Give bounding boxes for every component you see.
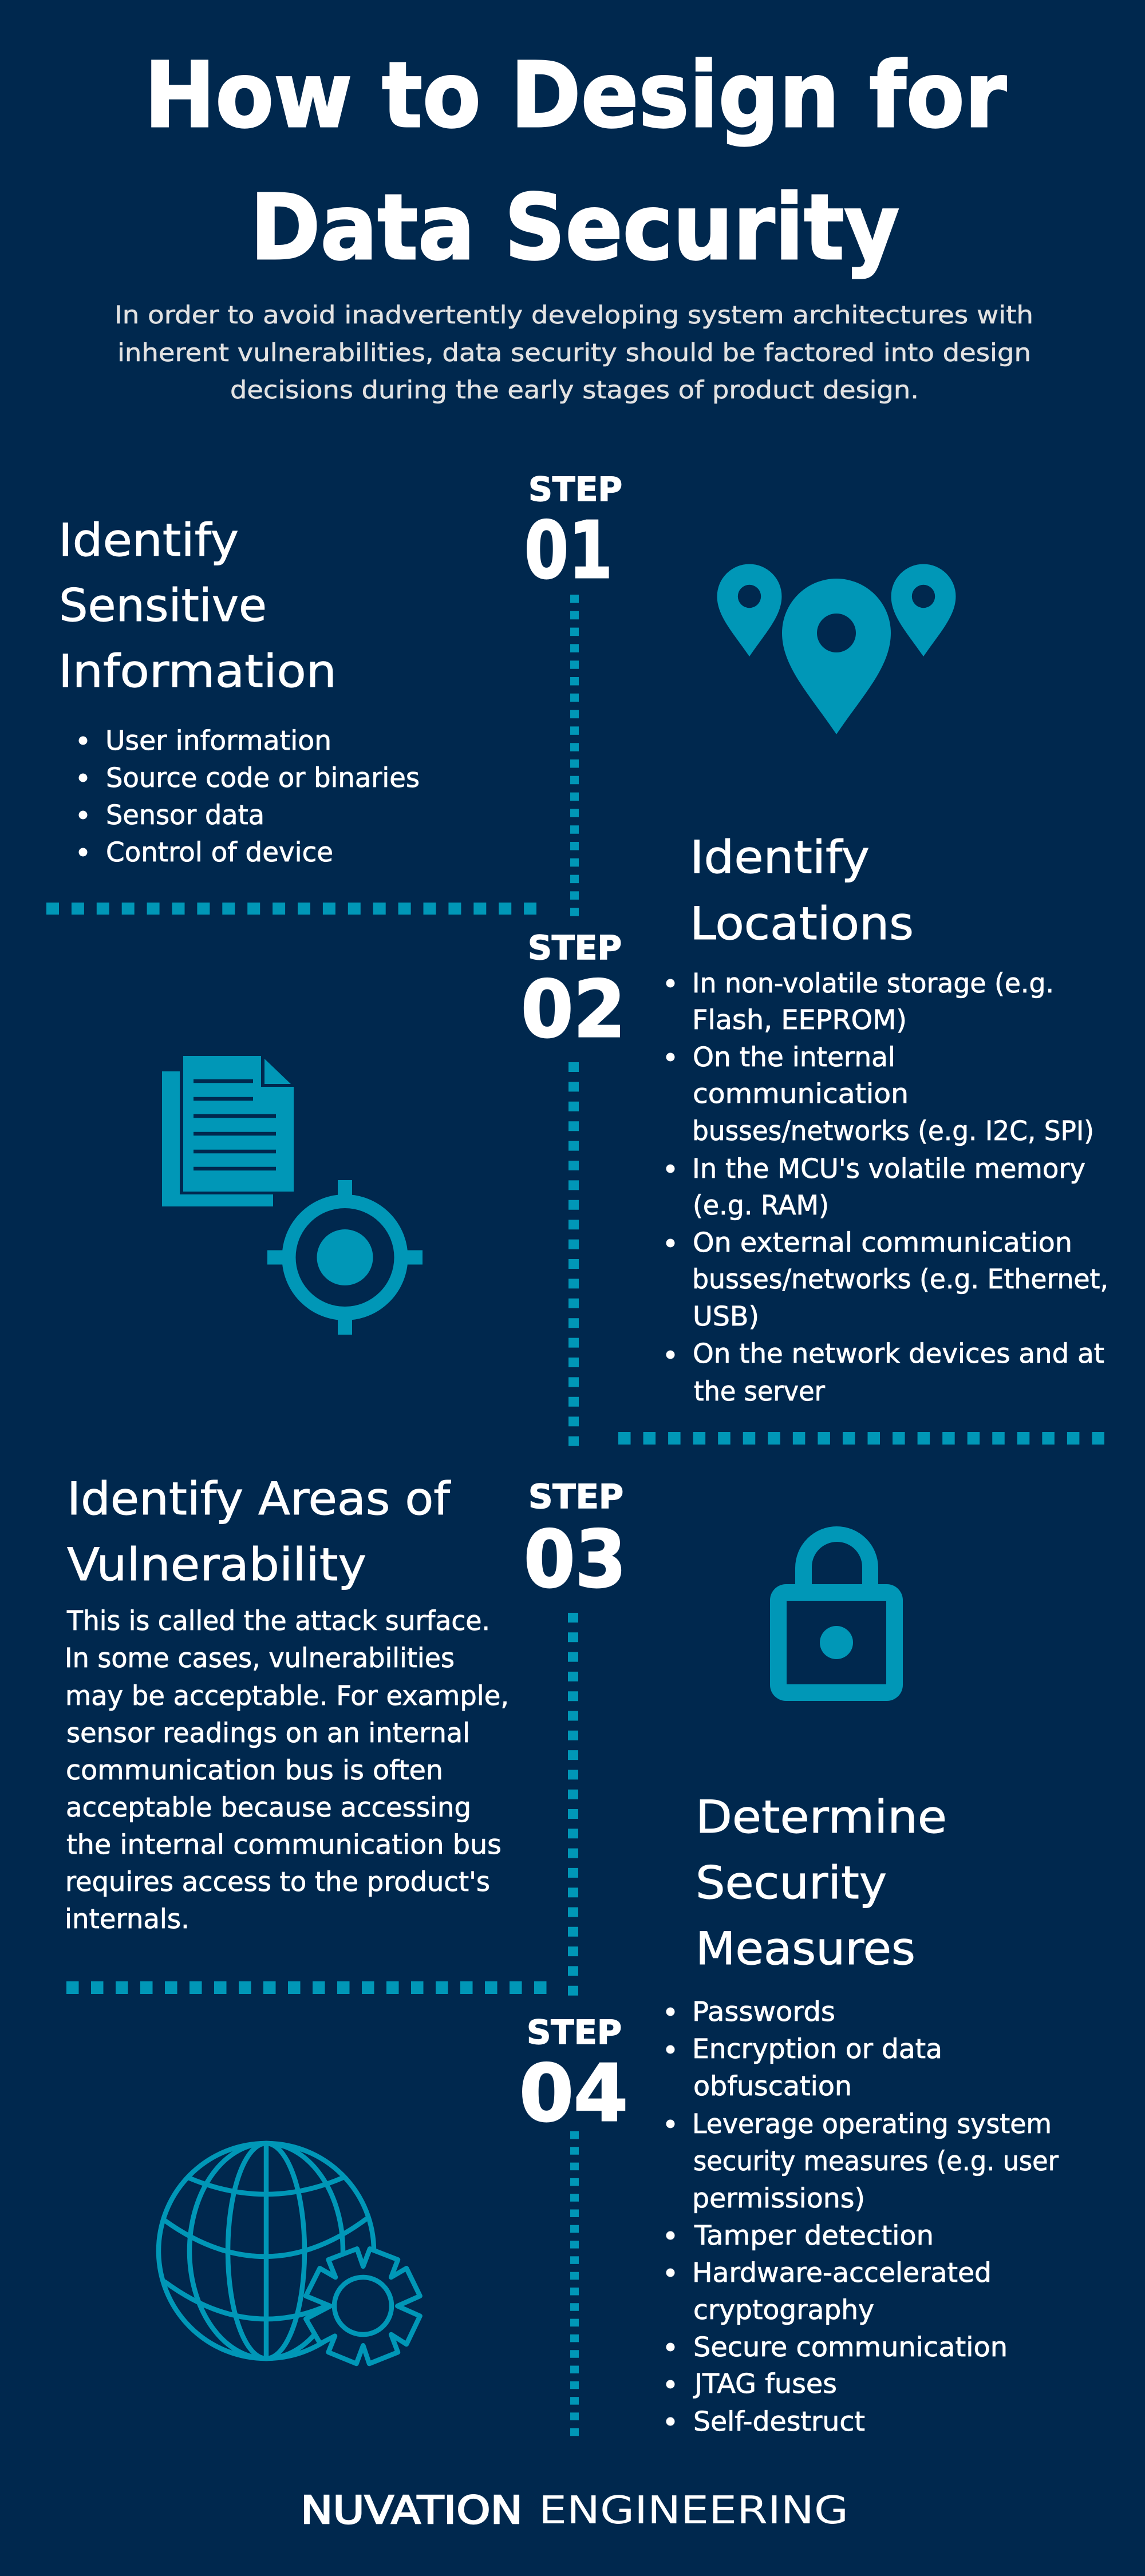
body text: attack surface: the internal communication bus <box>66 1829 502 1861</box>
list: locations: On external communication <box>693 1227 1072 1259</box>
step 02 label: STEP <box>528 928 622 967</box>
heading: determine security measures: Security <box>696 1857 887 1909</box>
list: security measures: cryptography <box>693 2294 874 2326</box>
icon: documents and target <box>162 1056 423 1335</box>
icon: location pins <box>717 564 956 734</box>
list: security measures: obfuscation <box>693 2071 852 2102</box>
heading: determine security measures: Measures <box>696 1922 915 1975</box>
body text: attack surface: This is called the attack surface. <box>66 1605 490 1637</box>
body text: attack surface: acceptable because accessing <box>66 1792 471 1823</box>
title <box>144 43 1006 280</box>
icon: globe and gear <box>159 2143 420 2364</box>
list: locations: busses/networks (e.g. I2C, SPI) <box>692 1115 1094 1147</box>
step 01 label: STEP <box>528 470 622 509</box>
step 02 label: 02 <box>521 964 626 1055</box>
panel: determine security measures <box>666 1791 1059 2437</box>
intro text: inherent vulnerabilities, data security should be factored into design <box>117 339 1031 367</box>
list: security measures: Tamper detection <box>694 2220 934 2251</box>
list: security measures <box>666 1996 1059 2437</box>
heading: determine security measures: Determine <box>696 1791 947 1843</box>
heading: identify sensitive information: Sensitive <box>59 579 267 632</box>
step 03 label: 03 <box>524 1514 626 1605</box>
list: locations: Flash, EEPROM) <box>692 1004 907 1036</box>
step 04 label: STEP <box>527 2013 622 2052</box>
list: locations: the server <box>694 1376 826 1407</box>
list: security measures: Encryption or data <box>692 2033 942 2065</box>
list: security measures: JTAG fuses <box>693 2368 837 2400</box>
intro text: In order to avoid inadvertently developing system architectures with <box>114 301 1033 330</box>
gear <box>306 2249 420 2364</box>
body text: attack surface: may be acceptable. For example, <box>65 1680 509 1712</box>
list: sensitive information: Sensor data <box>106 800 264 831</box>
body text: attack surface: sensor readings on an internal <box>66 1718 470 1749</box>
body text: attack surface: communication bus is often <box>66 1755 443 1786</box>
heading: identify locations: Identify <box>690 831 870 884</box>
panel: identify locations <box>666 831 1108 1407</box>
step 01 label <box>524 470 622 596</box>
heading: identify locations <box>690 831 914 950</box>
front document <box>183 1056 294 1192</box>
footer logo <box>301 2488 848 2533</box>
heading: identify locations: Locations <box>690 897 914 950</box>
heading: identify sensitive information <box>58 514 337 698</box>
list: security measures: security measures (e.g. user <box>693 2146 1059 2177</box>
heading: determine security measures <box>696 1791 947 1975</box>
step 02 label <box>521 928 626 1055</box>
list: locations: In the MCU's volatile memory <box>692 1153 1085 1185</box>
step 04 label: 04 <box>519 2048 628 2139</box>
footer logo: ENGINEERING <box>539 2488 848 2533</box>
body text: attack surface: internals. <box>65 1904 189 1935</box>
list: locations: On the network devices and at <box>693 1338 1104 1370</box>
heading: identify areas of vulnerability: Identify Areas of <box>67 1473 451 1525</box>
list: security measures: Secure communication <box>693 2332 1008 2363</box>
target <box>267 1180 423 1335</box>
step 03 label: STEP <box>528 1477 623 1516</box>
heading: identify sensitive information: Identify <box>58 514 239 567</box>
body text: attack surface <box>65 1605 509 1935</box>
list: security measures: permissions) <box>692 2183 865 2214</box>
body text: attack surface: In some cases, vulnerabilities <box>65 1643 455 1674</box>
title: Data Security <box>250 175 899 280</box>
list: locations: On the internal <box>693 1042 895 1073</box>
list: security measures: Leverage operating system <box>692 2108 1052 2140</box>
list: security measures: Self-destruct <box>693 2406 865 2437</box>
list: sensitive information: User information <box>105 725 331 757</box>
list: locations: In non-volatile storage (e.g. <box>692 968 1054 999</box>
list: locations <box>666 968 1108 1407</box>
title: How to Design for <box>144 43 1006 148</box>
list: locations: (e.g. RAM) <box>693 1190 829 1221</box>
panel: identify areas of vulnerability <box>65 1473 509 1935</box>
heading: identify sensitive information: Information <box>58 645 337 698</box>
list: locations: communication <box>693 1078 909 1110</box>
list: security measures: Hardware-accelerated <box>692 2257 992 2289</box>
heading: identify areas of vulnerability: Vulnerability <box>67 1538 366 1591</box>
panel: identify sensitive information <box>58 514 420 868</box>
heading: identify areas of vulnerability <box>67 1473 451 1591</box>
page fold <box>264 1059 291 1084</box>
list: sensitive information: Control of device <box>106 837 333 868</box>
list: sensitive information: Source code or binaries <box>106 762 420 794</box>
list: security measures: Passwords <box>692 1996 835 2028</box>
intro text <box>114 301 1033 405</box>
step 03 label <box>524 1477 626 1605</box>
body text: attack surface: requires access to the product's <box>65 1866 490 1898</box>
list: locations: USB) <box>693 1301 759 1332</box>
globe <box>159 2143 374 2359</box>
step 01 label: 01 <box>524 505 613 596</box>
icon: padlock <box>770 1526 903 1701</box>
footer logo: NUVATION <box>301 2488 523 2533</box>
list: sensitive information <box>79 725 420 868</box>
list: locations: busses/networks (e.g. Ethernet, <box>692 1264 1108 1295</box>
back document <box>162 1071 273 1206</box>
intro text: decisions during the early stages of product design. <box>230 376 919 405</box>
